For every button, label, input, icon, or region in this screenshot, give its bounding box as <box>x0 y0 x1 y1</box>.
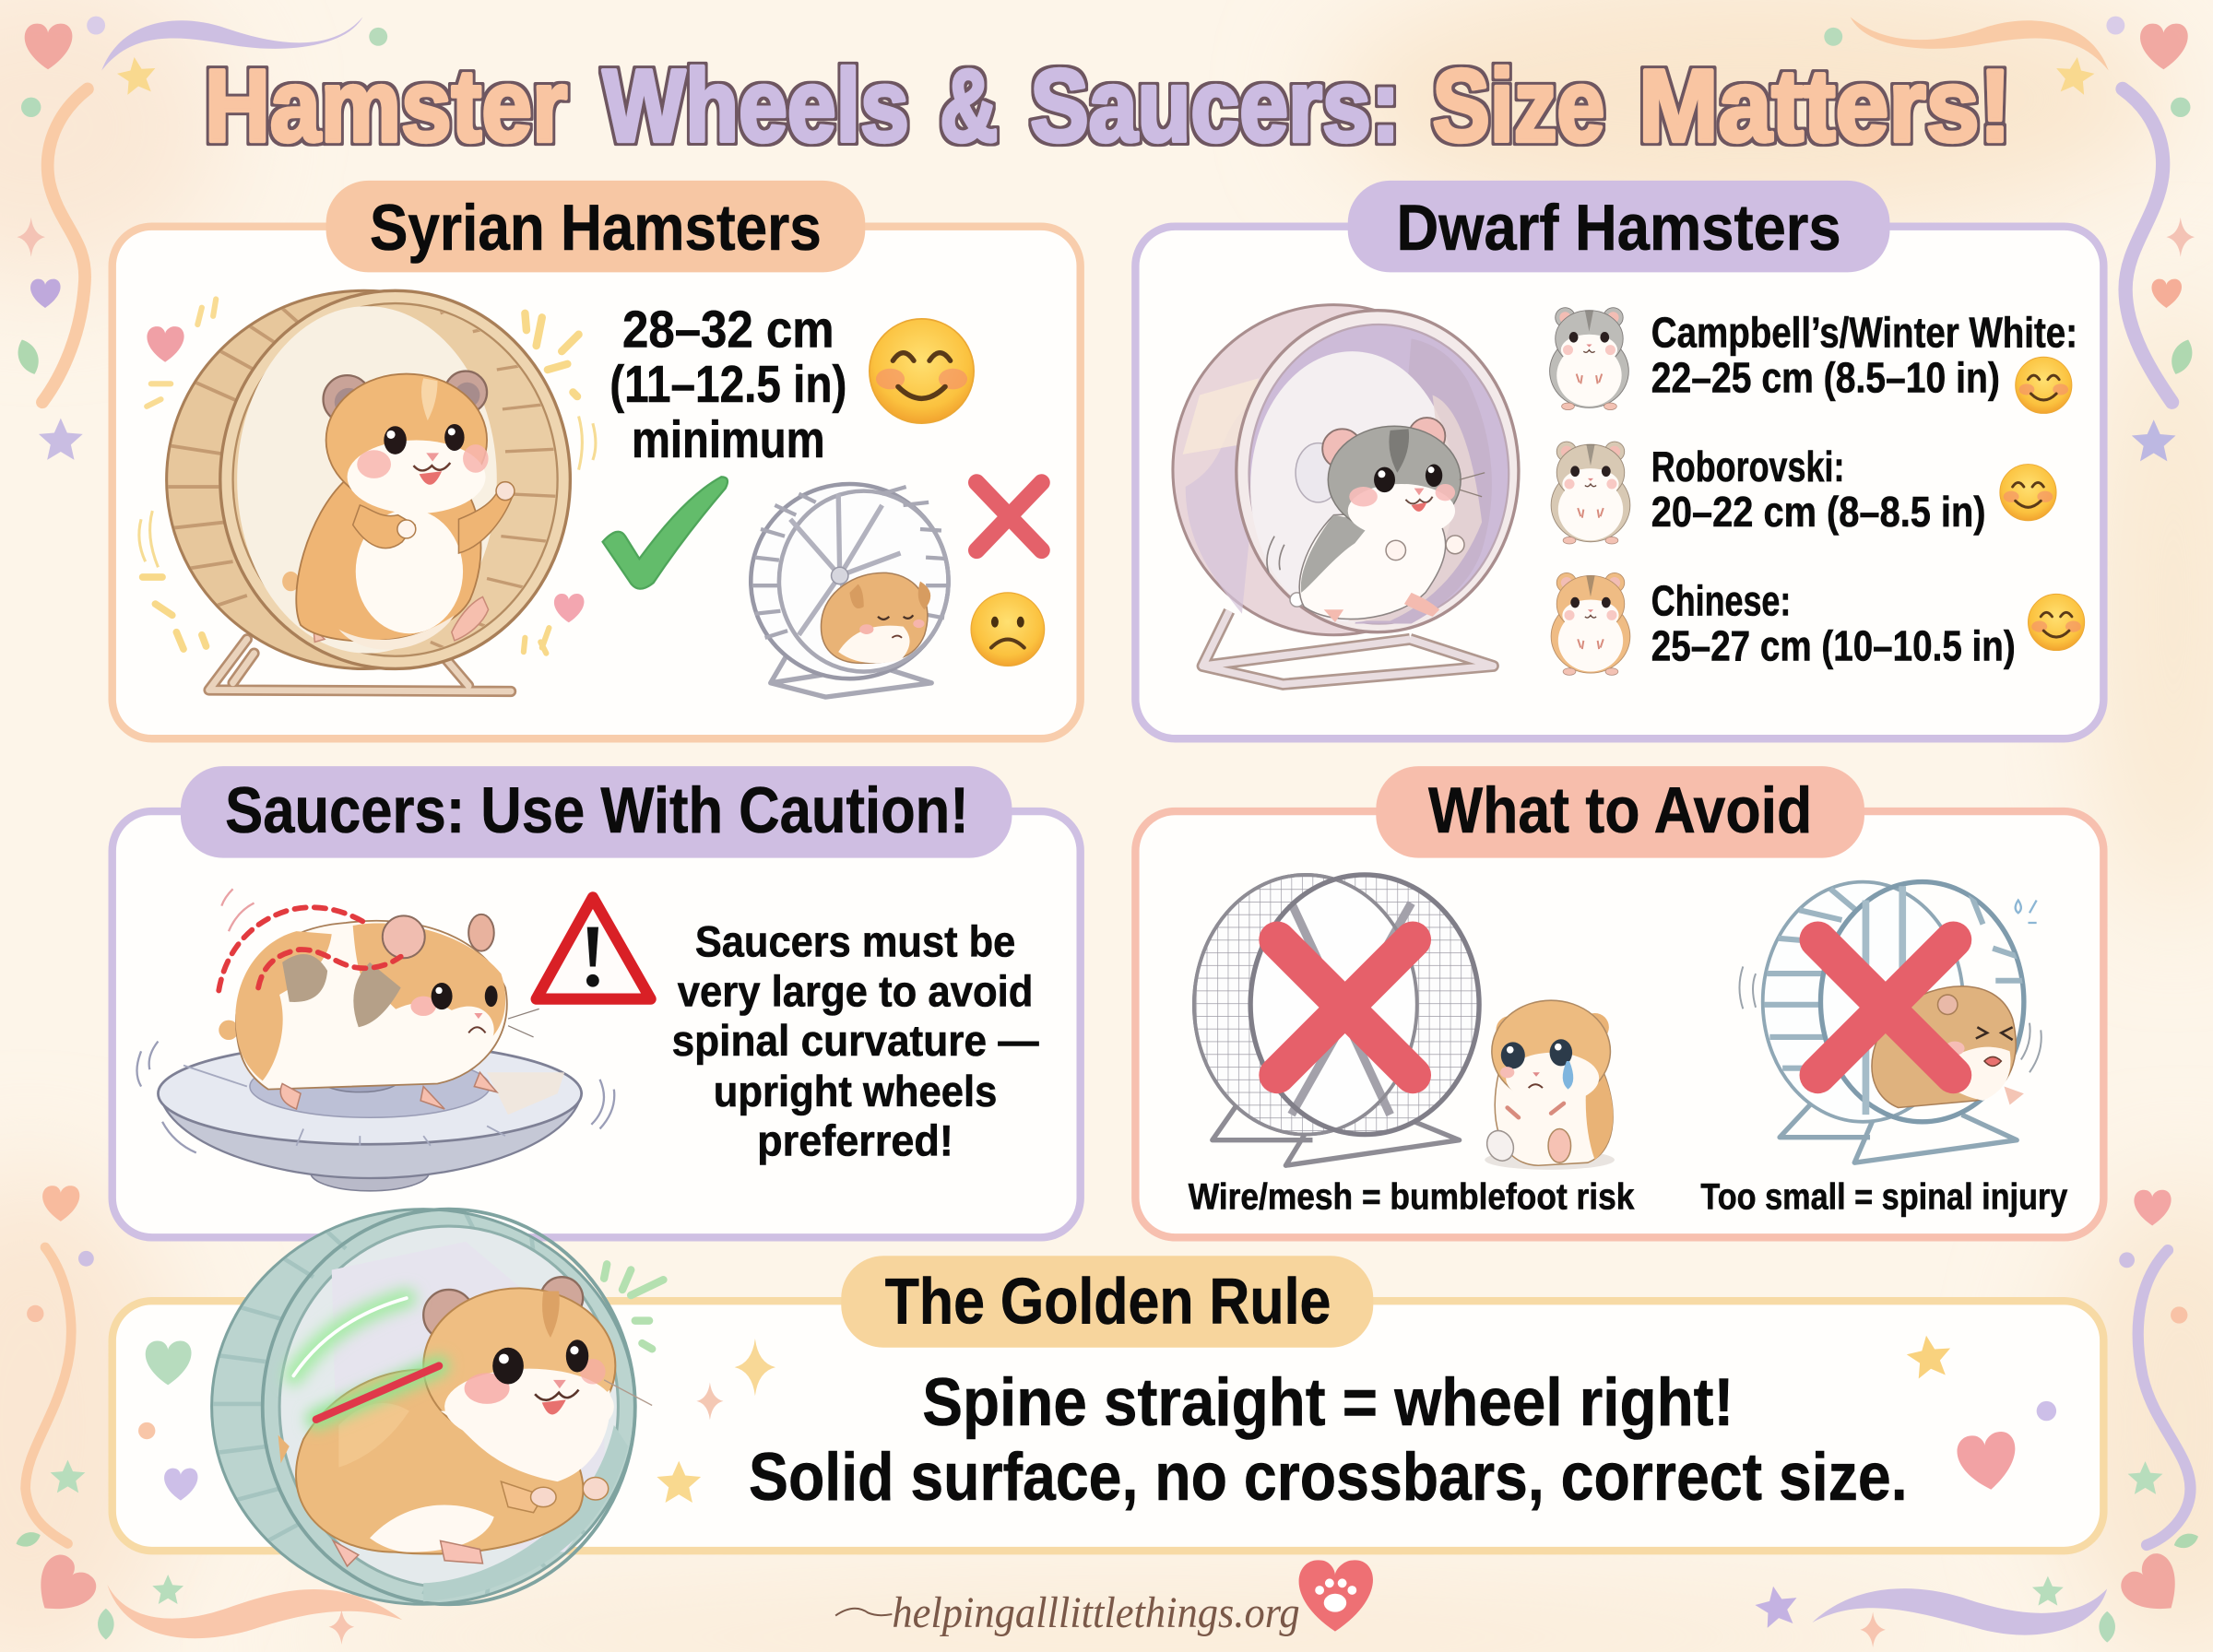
hamster <box>821 572 930 663</box>
size text <box>609 301 846 469</box>
hamster <box>278 1277 652 1566</box>
heading pill: The Golden Rule <box>885 1265 1331 1338</box>
mini hamster <box>1550 308 1628 410</box>
straight spine line <box>293 1298 439 1420</box>
panel: Dwarf hamsters <box>1135 181 2103 738</box>
panel frame <box>1135 227 2103 738</box>
illustration: hamster on saucer <box>136 889 614 1191</box>
panel: Syrian hamsters <box>112 181 1081 738</box>
title: Matters! <box>1639 48 2011 163</box>
hamster <box>219 914 539 1109</box>
heading pill: Syrian Hamsters <box>370 191 822 264</box>
emoji <box>2016 357 2072 413</box>
icon: sad emoji <box>971 593 1045 666</box>
caption: Wire/mesh = bumblefoot risk <box>1189 1177 1635 1218</box>
panel frame <box>112 227 1081 738</box>
corner decoration: bottom right <box>1753 1190 2200 1647</box>
panel decorations <box>138 1332 2056 1503</box>
heading pill: What to Avoid <box>1428 773 1812 846</box>
title: Size <box>1433 48 1604 163</box>
red cross <box>1277 939 1413 1075</box>
size text: minimum <box>632 411 825 469</box>
red cross <box>1817 939 1953 1075</box>
saucer text <box>672 918 1039 1166</box>
emoji <box>2028 594 2085 651</box>
hamster <box>1872 986 2024 1108</box>
dashed spine curve <box>219 907 401 990</box>
title: Wheels <box>603 48 909 163</box>
panel: What to avoid <box>1135 766 2103 1237</box>
species: Chinese <box>1551 572 2085 675</box>
corner decoration: top left <box>13 17 387 460</box>
panel: Saucers <box>112 766 1081 1237</box>
hamster <box>1290 418 1485 622</box>
heading pill: Dwarf Hamsters <box>1397 191 1841 264</box>
icon: red cross <box>976 482 1042 550</box>
caption: Too small = spinal injury <box>1700 1177 2067 1218</box>
motion marks and hearts <box>139 299 596 654</box>
golden rule text: Spine straight = wheel right! <box>922 1363 1734 1440</box>
size text: (11–12.5 in) <box>609 356 846 414</box>
icon: warning triangle <box>537 897 651 999</box>
icon: happy emoji <box>870 319 974 423</box>
stress marks <box>1739 966 2041 1072</box>
illustration: small wire wheel with cramped hamster <box>751 484 949 697</box>
species: Roborovski <box>1551 442 2056 544</box>
panel frame <box>112 1301 2103 1551</box>
panel frame <box>1135 811 2103 1237</box>
heading pill: Saucers: Use With Caution! <box>225 773 969 846</box>
emoji <box>2000 465 2056 521</box>
saucer text: spinal curvature — <box>672 1017 1039 1066</box>
illustration: wire mesh wheel crossed out <box>1194 875 1479 1165</box>
species: Campbell's / Winter White: Campbell’s/Winter White: <box>1651 309 2077 357</box>
hamster <box>282 372 515 650</box>
species: Chinese: Chinese: <box>1651 576 1791 624</box>
panel: The Golden Rule <box>112 1256 2103 1551</box>
icon: heart with paw <box>1299 1560 1373 1632</box>
mini hamster <box>1551 442 1630 544</box>
footer website credit: helpingalllittlethings.org <box>892 1589 1300 1637</box>
species: Campbell's / Winter White: 22–25 cm (8.5–10 in) <box>1651 354 2000 402</box>
mini hamster <box>1551 572 1630 675</box>
icon: green check mark <box>603 477 728 589</box>
illustration: dwarf hamster in pastel wheel <box>1173 305 1519 684</box>
golden rule text: Solid surface, no crossbars, correct size. <box>749 1438 1908 1515</box>
species: Campbell's / Winter White <box>1550 308 2077 413</box>
illustration: hamster in teal wheel with straight spine <box>209 1210 663 1604</box>
saucer text: upright wheels <box>714 1068 997 1116</box>
size text: 28–32 cm <box>622 301 834 360</box>
species: Chinese: 25–27 cm (10–10.5 in) <box>1651 621 2016 669</box>
corner decoration: bottom left <box>14 1186 402 1645</box>
illustration: crying hamster with bandaged foot <box>1482 1000 1615 1170</box>
species: Roborovski: Roborovski: <box>1651 442 1844 490</box>
golden rule text <box>749 1363 1908 1515</box>
species: Roborovski: 20–22 cm (8–8.5 in) <box>1651 488 1986 536</box>
panel frame <box>112 811 1081 1237</box>
saucer text: preferred! <box>757 1117 953 1166</box>
saucer text: Saucers must be <box>695 918 1015 967</box>
illustration: hamster in large wooden wheel <box>162 289 570 691</box>
corner decoration: top right <box>1824 17 2197 461</box>
saucer text: very large to avoid <box>678 967 1033 1016</box>
title <box>205 48 2011 163</box>
green sparkle marks <box>604 1264 663 1349</box>
title: Hamster <box>205 48 567 163</box>
title: Saucers: <box>1030 48 1400 163</box>
title: & <box>940 48 998 163</box>
illustration: too-small wheel crossed out <box>1739 882 2041 1162</box>
